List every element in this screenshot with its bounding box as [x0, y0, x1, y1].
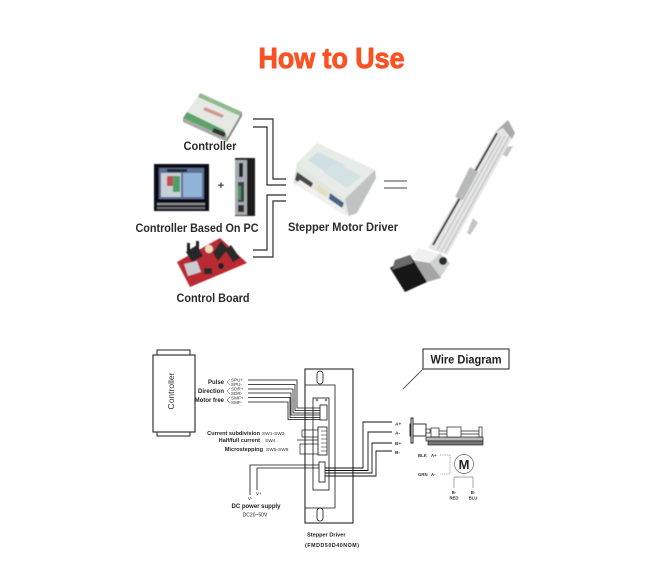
- connector lines to driver: [253, 119, 286, 257]
- signal labels: Pulse: [208, 380, 225, 386]
- rail slot: [433, 133, 497, 245]
- driver caption: [305, 532, 359, 549]
- extruded rail body: [428, 120, 515, 255]
- switch labels: Half/full current: [219, 438, 260, 444]
- wire diagram tag: [423, 349, 509, 369]
- icon: motor coil diagram: BLU: [469, 496, 477, 500]
- label: Control Board: Control Board: [176, 293, 250, 305]
- motor wire labels: B-: [395, 450, 400, 456]
- icon: motor coil diagram: BLK: [418, 453, 428, 458]
- driver caption: Stepper Driver: [307, 532, 346, 538]
- controller block: [153, 350, 195, 436]
- switch labels: [207, 431, 264, 453]
- power wires: [250, 465, 319, 495]
- power labels: DC20~50V: [243, 512, 268, 518]
- icon: motor coil diagram: A+: [431, 453, 437, 458]
- icon: motor coil diagram: B-: [471, 490, 476, 495]
- motor wire labels: A-: [395, 430, 400, 436]
- signal wires: [248, 380, 320, 420]
- icon: equals sign: [384, 181, 407, 188]
- icon: motor coil diagram: M: [459, 457, 469, 472]
- icon: actuator side view: [410, 418, 483, 445]
- switch ranges: SW1-SW3: [262, 431, 285, 437]
- motor wire labels: [395, 422, 401, 456]
- icon: motor coil diagram: RED: [449, 496, 459, 500]
- icon: plus sign: +: [218, 180, 224, 192]
- icon: stepper motor driver: [293, 143, 376, 216]
- icon: industrial PC: [235, 158, 255, 216]
- icon: red control board: [177, 238, 247, 287]
- signal terminals: SMF+: [231, 396, 244, 400]
- signal labels: Motor free: [195, 398, 225, 404]
- controller block: Controller: [166, 372, 176, 409]
- switch labels: Microstepping: [225, 447, 264, 453]
- brackets: [503, 146, 513, 157]
- panel: wire diagram: [153, 349, 509, 549]
- motor wires: [325, 422, 392, 476]
- title: How to Use: [258, 43, 404, 75]
- panel: system overview: [136, 93, 515, 305]
- signal terminals: SDR-: [231, 391, 243, 396]
- wire diagram tag: Wire Diagram: [430, 354, 502, 366]
- switch ranges: SW5-SW8: [266, 447, 289, 453]
- signal terminals: SPU-: [231, 382, 242, 387]
- label: Controller Based On PC: Controller Based On PC: [136, 223, 258, 235]
- signal terminals: SPU+: [231, 378, 243, 382]
- signal labels: [195, 380, 225, 404]
- switch ranges: SW4: [265, 438, 276, 444]
- signal terminals: SMF-: [231, 400, 243, 405]
- motor wire labels: A+: [395, 422, 401, 428]
- end cap: [495, 120, 515, 139]
- switch labels: Current subdivision: [207, 431, 261, 437]
- driver caption: (FMDD50D40NOM): [305, 543, 359, 549]
- switch ranges: [262, 431, 289, 453]
- stepper driver body: [305, 369, 353, 523]
- icon: linear actuator: [390, 120, 515, 292]
- motor: [390, 255, 427, 292]
- label: Stepper Motor Driver: Stepper Motor Driver: [288, 222, 398, 234]
- icon: motor coil diagram: GRN: [418, 472, 428, 477]
- signal labels: Direction: [198, 389, 224, 395]
- power labels: [231, 491, 281, 518]
- icon: motor coil diagram: A-: [431, 472, 436, 477]
- label: Controller: Controller: [184, 141, 237, 153]
- carriage: [455, 167, 478, 200]
- signal terminals: [227, 378, 244, 405]
- icon: motor coil diagram: B-: [452, 490, 457, 495]
- power labels: V+: [256, 491, 262, 497]
- icon: controller module: [183, 93, 242, 142]
- signal terminals: SDR+: [231, 386, 244, 392]
- power labels: DC power supply: [231, 504, 281, 510]
- power labels: V-: [248, 496, 253, 502]
- icon: motor coil diagram: [418, 453, 477, 500]
- leader line: [403, 369, 423, 389]
- motor mount: [412, 248, 442, 263]
- switch wires: [297, 430, 318, 454]
- icon: touch screen controller: [154, 164, 209, 211]
- motor wire labels: B+: [395, 441, 401, 447]
